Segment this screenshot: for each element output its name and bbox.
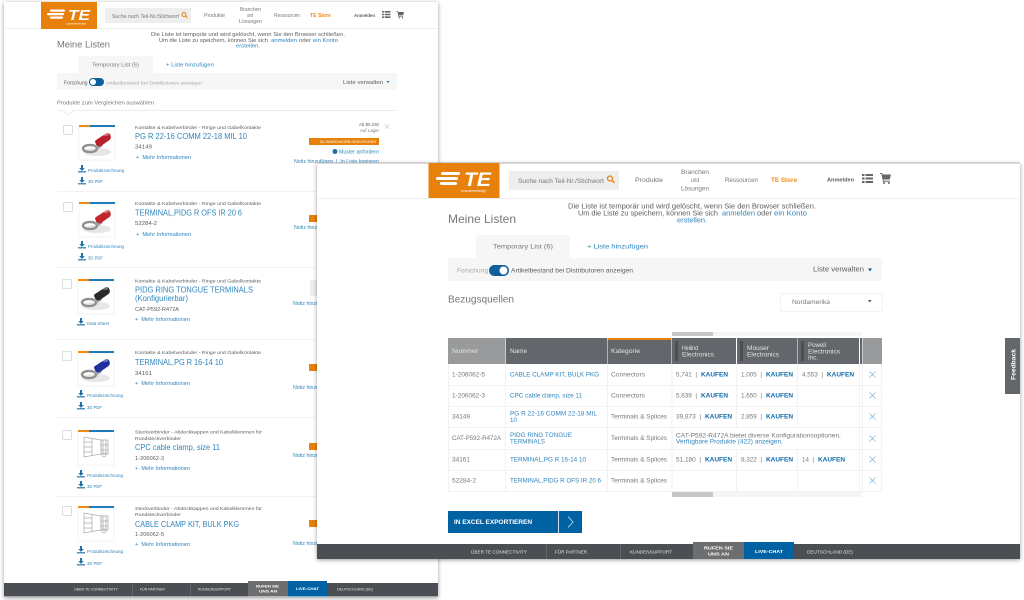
product row 5 bbox=[62, 430, 379, 489]
footer: right window: FÜR PARTNER bbox=[555, 550, 587, 554]
footer: right window: KUNDENSUPPORT bbox=[630, 550, 672, 554]
product row 1: Kontakte & Kabelverbinder - Ringe und Gabelkontakte bbox=[135, 125, 261, 131]
table row 4: CAT-P592-R472A bbox=[452, 436, 501, 442]
footer: left window: ÜBER TE CONNECTIVITY bbox=[74, 588, 119, 592]
table row 1: KAUFEN bbox=[766, 372, 793, 378]
product row 5: CPC cable clamp, size 11 bbox=[135, 443, 221, 452]
notice text: anmelden bbox=[271, 38, 297, 44]
table row 4 bbox=[452, 433, 876, 446]
table row 5: KAUFEN bbox=[705, 458, 732, 464]
product row 1: Notiz hinzufügen | In Liste kopieren bbox=[294, 159, 379, 165]
table row 6: Terminals & Splices bbox=[611, 478, 667, 484]
table header bbox=[448, 338, 882, 364]
footer: left window bbox=[4, 581, 438, 596]
navigation: Anmelden bbox=[354, 13, 375, 18]
table row 2 bbox=[452, 392, 876, 400]
table row 2: Connectors bbox=[611, 394, 645, 400]
subheading: Produkte zum Vergleichen auswählen bbox=[57, 100, 154, 106]
logo: TE connectivity bbox=[428, 163, 500, 198]
table row 2: 1-206062-3 bbox=[452, 394, 486, 400]
table row 5: 51,180 | bbox=[676, 458, 701, 464]
navigation: Branchen bbox=[681, 169, 710, 176]
product row 6 bbox=[62, 506, 379, 566]
table row 6: 52284-2 bbox=[452, 478, 477, 484]
table row 3 bbox=[452, 412, 876, 424]
product row 2: Produktzeichnung bbox=[88, 244, 125, 249]
product row 6: 3D PDF bbox=[87, 561, 102, 566]
notice text: Um die Liste zu speichern, können Sie sich bbox=[578, 210, 718, 218]
scrollbar: top bbox=[672, 332, 862, 336]
product row 1: Produktzeichnung bbox=[88, 168, 125, 173]
table row 3: 10 bbox=[510, 418, 518, 424]
table row 3: KAUFEN bbox=[705, 414, 732, 420]
product row 4: Notiz hinzufügen | In Liste kopieren bbox=[293, 385, 378, 391]
product row 5: Rundsteckverbinder bbox=[135, 436, 181, 442]
table header: Inc. bbox=[808, 356, 818, 362]
notice text: erstellen. bbox=[677, 218, 707, 224]
table header: Electronics bbox=[808, 350, 840, 356]
product row 1: PG R 22-16 COMM 22-18 MIL 10 bbox=[135, 132, 248, 141]
navigation: TE Store bbox=[771, 177, 798, 184]
navigation: Lösungen bbox=[239, 19, 262, 25]
notice text: oder bbox=[757, 210, 773, 218]
product row 6: Rundsteckverbinder bbox=[135, 512, 181, 518]
table row 1: 5,741 | bbox=[676, 372, 697, 378]
table row 1: 1-206062-5 bbox=[452, 372, 486, 378]
product row 3: Notiz hinzufügen | In Liste kopieren bbox=[293, 301, 378, 307]
table row 3: KAUFEN bbox=[766, 414, 793, 420]
product row 3: Kontakte & Kabelverbinder - Ringe und Gabelkontakte bbox=[135, 278, 261, 284]
table row 3: 34149 bbox=[452, 414, 471, 420]
table row 5: TERMINAL,PG R 16-14 10 bbox=[510, 458, 587, 464]
navigation: und bbox=[247, 13, 253, 19]
search box bbox=[509, 171, 619, 190]
logo: TE connectivity: connectivity bbox=[461, 189, 487, 193]
footer: right window: ÜBER TE CONNECTIVITY bbox=[471, 550, 527, 554]
product row 5: 1-206062-3 bbox=[135, 456, 164, 462]
dropdown: region bbox=[780, 294, 882, 312]
product row 2: 3D PDF bbox=[88, 256, 103, 260]
footer: right window bbox=[317, 542, 1020, 559]
product row 3: Data Sheet bbox=[87, 321, 110, 326]
product row 5: Notiz hinzufügen | In Liste kopieren bbox=[293, 453, 378, 459]
table row 5: 14 | bbox=[802, 458, 814, 464]
table header: Electronics bbox=[747, 352, 779, 358]
product row 5: + Mehr Informationen bbox=[135, 466, 190, 472]
toolbar: Forschung bbox=[64, 80, 88, 86]
feedback tab bbox=[1005, 338, 1020, 394]
footer: right window: RUFEN SIE bbox=[704, 546, 734, 552]
table row 2: 5,639 | bbox=[676, 394, 697, 400]
logo: TE connectivity: connectivity bbox=[66, 22, 87, 26]
table header: Kategorie bbox=[611, 349, 641, 355]
heading: Meine Listen: Meine Listen bbox=[448, 212, 516, 226]
button: export to Excel: IN EXCEL EXPORTIEREN bbox=[454, 519, 532, 526]
dropdown: region: Nordamerika bbox=[792, 300, 831, 306]
table row 5 bbox=[452, 456, 876, 464]
product row 2: Notiz hinzufügen | In Liste kopieren bbox=[294, 225, 379, 231]
footer: right window: DEUTSCHLAND (DE) bbox=[807, 550, 854, 554]
notice text: Die Liste ist temporär und wird gelöscht, wenn Sie den Browser schließen. bbox=[151, 32, 345, 38]
navigation: Branchen bbox=[240, 7, 261, 13]
navigation: Produkte bbox=[204, 13, 225, 19]
notice text bbox=[568, 204, 816, 224]
heading: Bezugsquellen: Bezugsquellen bbox=[448, 294, 514, 306]
navigation bbox=[635, 169, 891, 192]
notice text: oder bbox=[299, 38, 311, 44]
toolbar bbox=[57, 73, 397, 90]
table header: Nummer bbox=[452, 349, 478, 355]
feedback tab: Feedback bbox=[1010, 349, 1018, 380]
product row 4: TERMINAL,PG R 16-14 10 bbox=[135, 358, 223, 367]
notice text: erstellen. bbox=[236, 44, 260, 50]
logo: TE connectivity: TE bbox=[68, 7, 91, 24]
scrollbar: bottom bbox=[672, 492, 862, 497]
table header: Name bbox=[510, 349, 528, 355]
search box: Suche nach Teil-Nr./Stichwort bbox=[112, 14, 179, 20]
product row 1 bbox=[64, 122, 389, 184]
toolbar: Liste verwalten bbox=[343, 80, 383, 86]
button: export to Excel bbox=[448, 511, 582, 533]
table row 5: Terminals & Splices bbox=[611, 458, 667, 464]
product row 2: Kontakte & Kabelverbinder - Ringe und Gabelkontakte bbox=[135, 201, 261, 207]
product row 3: + Mehr Informationen bbox=[135, 317, 190, 323]
footer: left window: DEUTSCHLAND (DE) bbox=[337, 588, 373, 592]
table row 1: 4,553 | bbox=[802, 372, 823, 378]
table row 4: PIDG RING TONGUE bbox=[510, 433, 572, 439]
table row 6 bbox=[452, 477, 876, 484]
product row 4: Produktzeichnung bbox=[87, 393, 124, 398]
table row 5: KAUFEN bbox=[818, 458, 845, 464]
product row 4 bbox=[62, 350, 379, 410]
product row 4: 34161 bbox=[135, 371, 152, 377]
product row 1: Auf Lager bbox=[360, 128, 380, 133]
notice text bbox=[151, 32, 345, 50]
product row 1: Ab $0.230 bbox=[359, 122, 380, 127]
product row 1: ZU WARENKORB HINZUFÜGEN bbox=[320, 140, 376, 144]
search box bbox=[105, 8, 191, 23]
search box: Suche nach Teil-Nr./Stichwort bbox=[518, 178, 604, 185]
product row 3: CAT-P592-R472A bbox=[135, 307, 180, 313]
product row 2: TERMINAL,PIDG R OFS IR 20 6 bbox=[135, 208, 242, 218]
table row 4: Terminals & Splices bbox=[611, 436, 667, 442]
product row 4: Kontakte & Kabelverbinder - Ringe und Gabelkontakte bbox=[135, 350, 261, 356]
navigation bbox=[204, 7, 404, 25]
notice text: Um die Liste zu speichern, können Sie sich bbox=[159, 38, 268, 44]
table row 2: KAUFEN bbox=[701, 394, 728, 400]
table row 3: 39,873 | bbox=[676, 414, 701, 420]
table row 2: CPC cable clamp, size 11 bbox=[510, 394, 583, 400]
product row 1: + Mehr Informationen bbox=[136, 155, 191, 161]
tabs bbox=[476, 235, 648, 258]
product row 2: + Mehr Informationen bbox=[136, 232, 191, 238]
tabs bbox=[78, 56, 214, 73]
table row 5: 8,322 | bbox=[741, 458, 762, 464]
toolbar: Artikelbestand bei Distributoren anzeigen bbox=[511, 268, 634, 274]
product row 6: Produktzeichnung bbox=[87, 549, 124, 554]
table: distributor comparison bbox=[448, 338, 882, 492]
footer: left window: UNS AN bbox=[259, 588, 277, 594]
table row 1 bbox=[452, 371, 876, 378]
navigation: Anmelden bbox=[827, 178, 855, 184]
product row 3: (Konfigurierbar) bbox=[135, 294, 188, 303]
table row 1: Connectors bbox=[611, 372, 645, 378]
panel: right window, Bezugsquellen comparison bbox=[317, 163, 1020, 559]
toolbar bbox=[448, 258, 882, 281]
table row 4: Verfügbare Produkte (422) anzeigen. bbox=[676, 440, 783, 446]
footer: left window: FÜR PARTNER bbox=[140, 588, 165, 592]
footer: left window: LIVE-CHAT bbox=[296, 586, 320, 591]
table header: Powell bbox=[808, 343, 826, 349]
product row 5: 3D PDF bbox=[87, 484, 102, 489]
product row 1: 3D PDF bbox=[88, 179, 103, 184]
table row 6: TERMINAL,PIDG R OFS IR 20 6 bbox=[510, 478, 602, 484]
notice text: ein Konto bbox=[313, 38, 338, 44]
table header: Electronics bbox=[682, 352, 714, 358]
table row 1: KAUFEN bbox=[827, 372, 854, 378]
toolbar: Artikelbestand bei Distributoren anzeigen bbox=[106, 80, 202, 86]
product row 6: Notiz hinzufügen | In Liste kopieren bbox=[293, 541, 378, 547]
footer: right window: LIVE-CHAT bbox=[755, 549, 783, 555]
navigation: und bbox=[691, 177, 699, 184]
product row 5: Produktzeichnung bbox=[87, 473, 124, 478]
table row 5: 34161 bbox=[452, 458, 471, 464]
navigation: Ressourcen bbox=[274, 13, 300, 19]
product row 6: + Mehr Informationen bbox=[135, 542, 190, 548]
toolbar: Liste verwalten bbox=[813, 266, 864, 274]
navigation: Ressourcen bbox=[725, 177, 759, 184]
product row 1: 34149 bbox=[135, 144, 152, 150]
table row 3: 2,859 | bbox=[741, 414, 762, 420]
product row 3: PIDG RING TONGUE TERMINALS bbox=[135, 286, 253, 294]
navigation: Lösungen bbox=[681, 186, 710, 192]
table row 1: CABLE CLAMP KIT, BULK PKG bbox=[510, 372, 599, 378]
tabs: Temporary List (6) bbox=[92, 62, 139, 68]
tabs: Temporary List (6) bbox=[493, 244, 553, 250]
table row 4: TERMINALS bbox=[510, 440, 545, 446]
product row 4: + Mehr Informationen bbox=[135, 381, 190, 387]
table header: Heilind bbox=[682, 346, 698, 352]
table row 2: KAUFEN bbox=[766, 394, 793, 400]
product row 3 bbox=[62, 278, 380, 326]
notice text: anmelden bbox=[722, 210, 755, 218]
table row 1: 1,005 | bbox=[741, 372, 762, 378]
heading: Meine Listen: Meine Listen bbox=[57, 40, 110, 50]
table row 3: PG R 22-16 COMM 22-18 MIL bbox=[510, 412, 598, 418]
tabs: + Liste hinzufügen bbox=[587, 244, 648, 250]
navigation: Produkte bbox=[635, 177, 664, 184]
footer: right window: UNS AN bbox=[708, 552, 730, 558]
footer: left window: RUFEN SIE bbox=[256, 584, 279, 588]
panel: left window, Meine Listen product list bbox=[4, 2, 438, 597]
notice text: ein Konto bbox=[774, 210, 807, 218]
product row 4: 3D PDF bbox=[87, 405, 102, 410]
toolbar: Forschung bbox=[457, 268, 489, 274]
product row 6: CABLE CLAMP KIT, BULK PKG bbox=[135, 520, 239, 529]
table row 3: Terminals & Splices bbox=[611, 414, 667, 420]
product row 2: 52284-2 bbox=[135, 221, 157, 227]
table row 1: KAUFEN bbox=[701, 372, 728, 378]
notice text: Die Liste ist temporär und wird gelöscht, wenn Sie den Browser schließen. bbox=[568, 204, 816, 210]
product row 6: 1-206062-5 bbox=[135, 532, 164, 538]
table row 5: KAUFEN bbox=[766, 458, 793, 464]
navigation: TE Store bbox=[310, 13, 331, 19]
product row 6: Steckverbinder - Abdeckkappen und Kabelklemmen für bbox=[135, 506, 262, 512]
product row 1: Muster anfordern bbox=[339, 150, 379, 156]
product row 2 bbox=[64, 201, 379, 260]
footer: left window: KUNDENSUPPORT bbox=[198, 588, 232, 592]
product row 5: Steckverbinder - Abdeckkappen und Kabelklemmen für bbox=[135, 430, 262, 436]
table row 2: 1,650 | bbox=[741, 394, 762, 400]
table header: Mouser bbox=[747, 346, 769, 352]
table row 4: CAT-P592-R472A bietet diverse Konfigurationsoptionen. bbox=[676, 434, 841, 440]
tabs: + Liste hinzufügen bbox=[166, 62, 214, 68]
logo: TE connectivity: TE bbox=[464, 170, 492, 191]
logo: TE connectivity bbox=[41, 2, 97, 29]
